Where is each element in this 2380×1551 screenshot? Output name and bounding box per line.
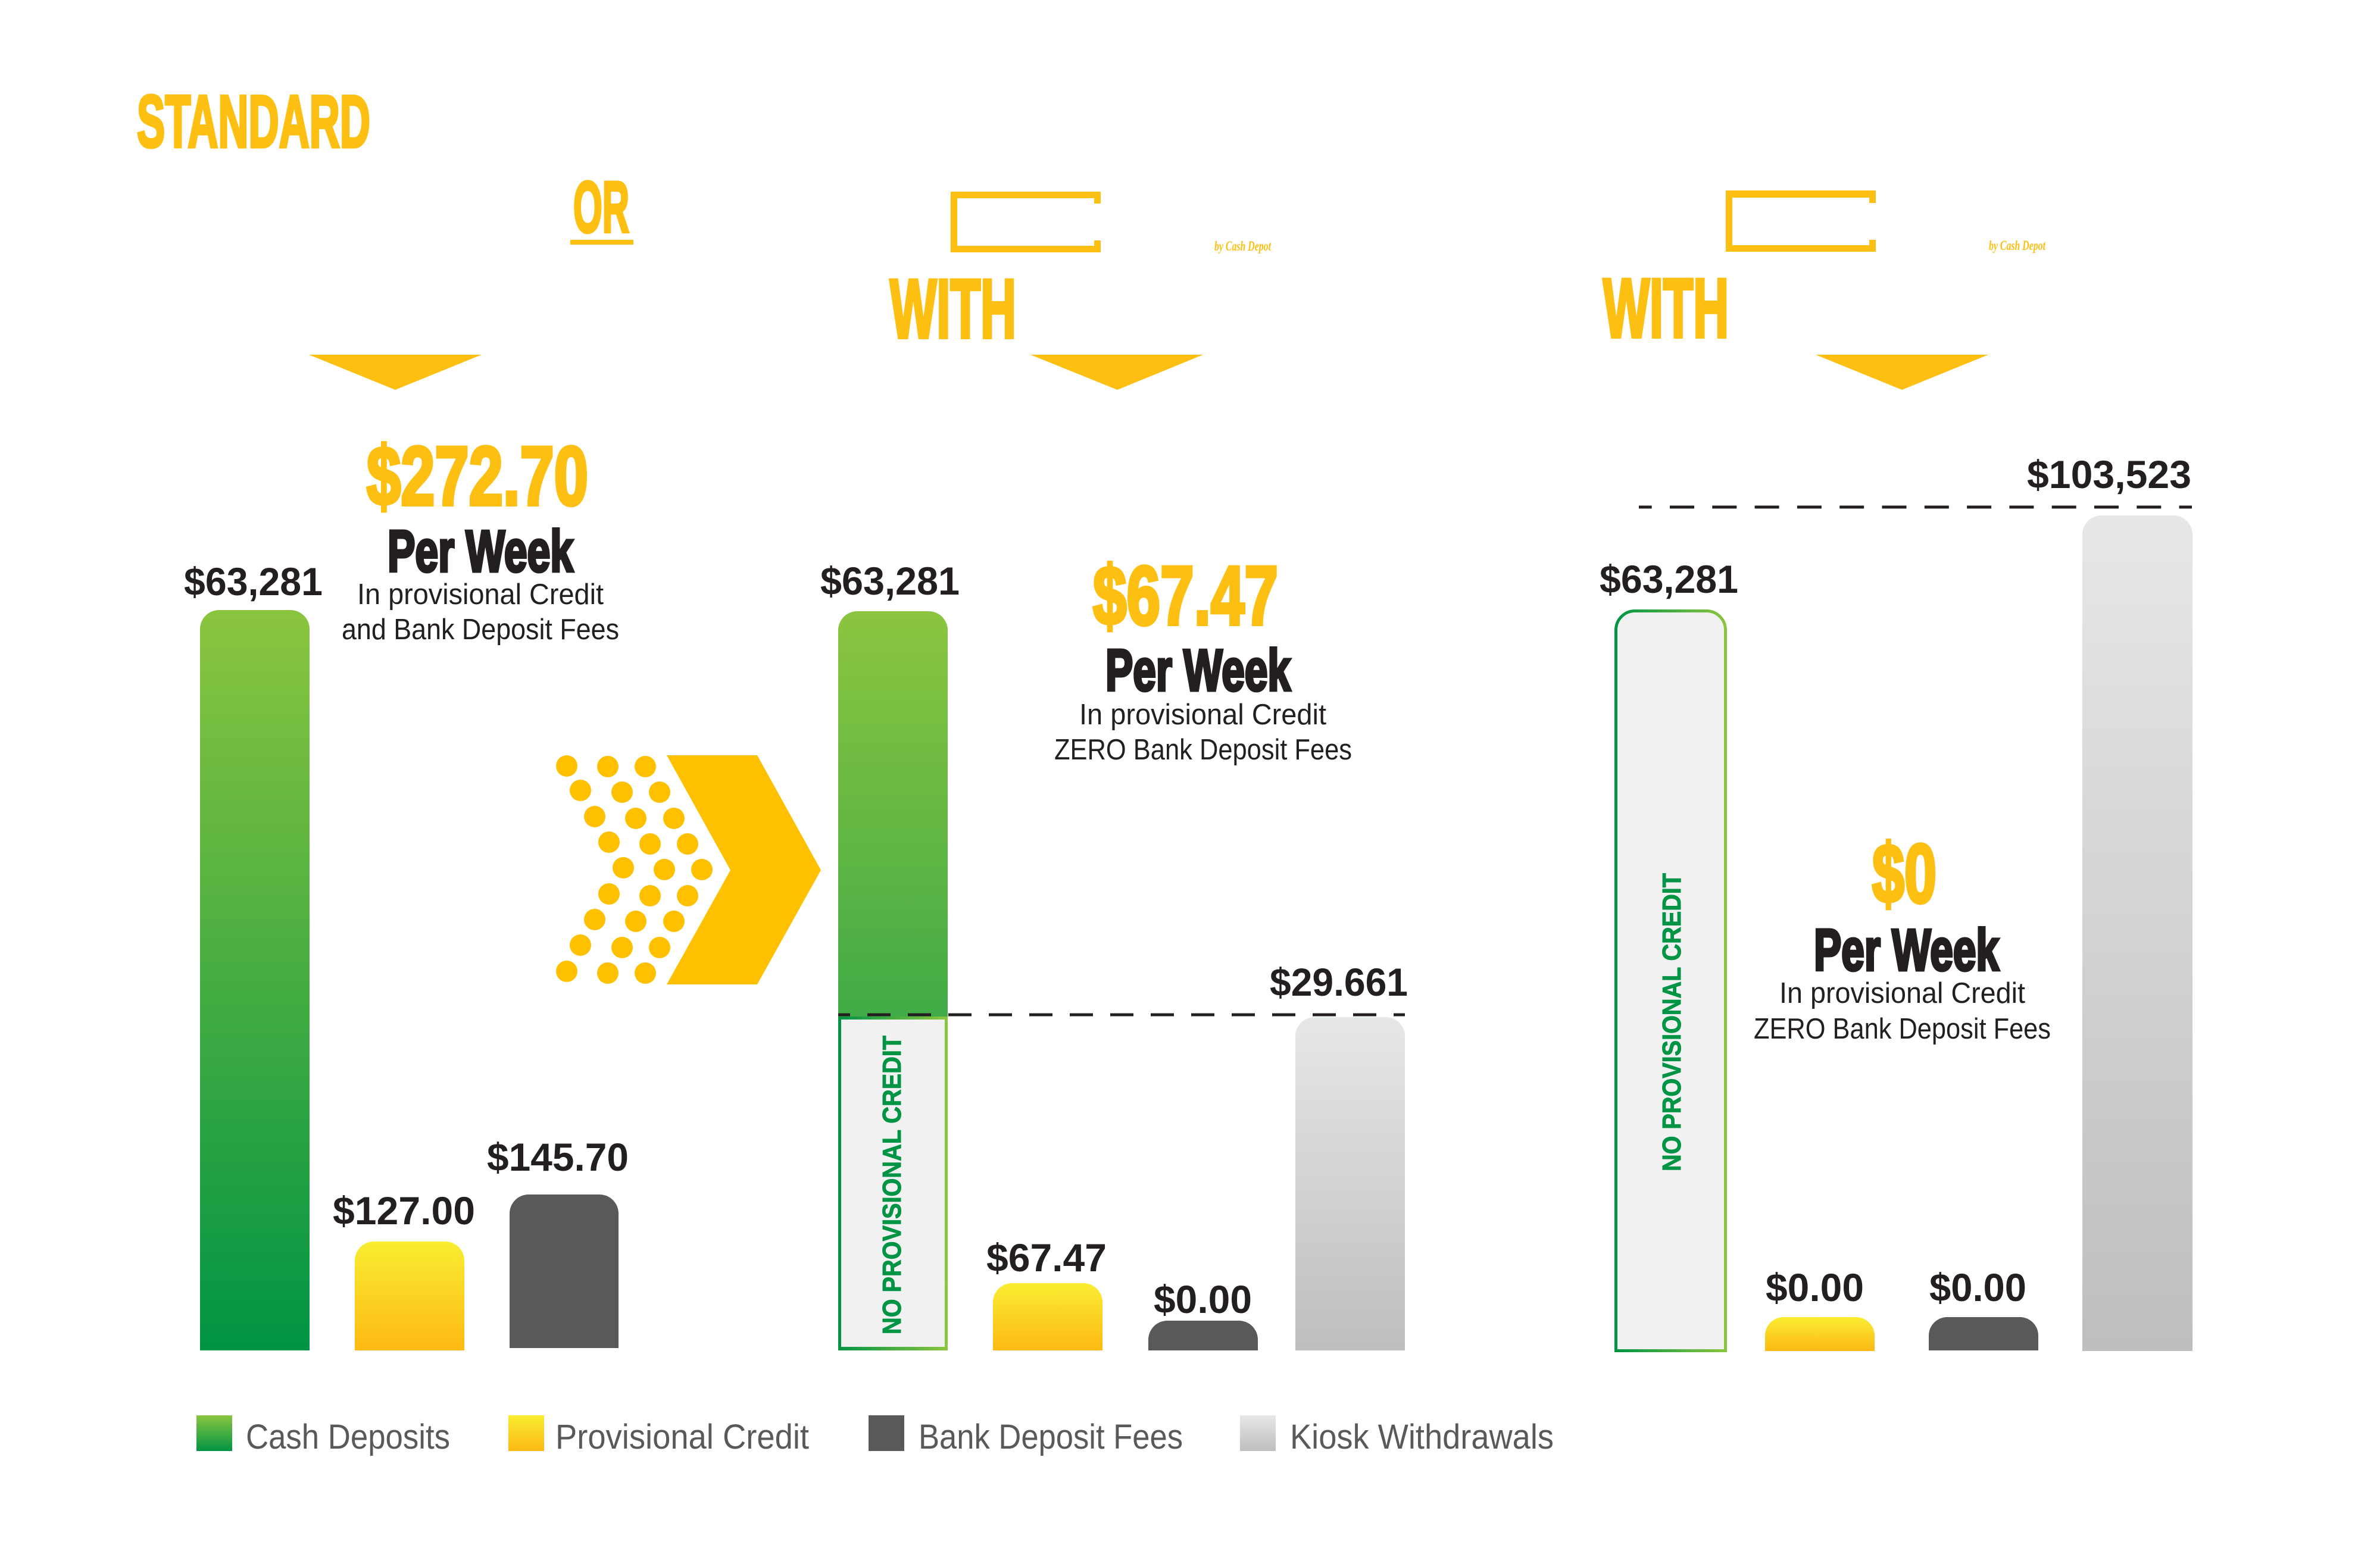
heading: OR [570, 167, 633, 248]
bar: kiosk withdrawals: $103,523 [2027, 452, 2191, 496]
box: no provisional credit: NO PROVISIONAL CREDIT [1657, 873, 1686, 1171]
dashed level line [838, 1013, 1405, 1017]
bar: kiosk withdrawals: $29.661 [1270, 960, 1408, 1004]
headline amount: $67.47 per week: ZERO Bank Deposit Fees [1054, 734, 1352, 766]
icon: down triangle [1030, 355, 1203, 390]
headline amount: $0 per week: Per Week [1814, 917, 1999, 983]
icon: down triangle [309, 355, 482, 390]
headline amount: $0 per week: In provisional Credit [1779, 977, 2025, 1009]
legend item: provisional credit: Provisional Credit [555, 1418, 809, 1456]
bar: bank deposit fees: $0.00 [1929, 1265, 2026, 1309]
legend item: kiosk withdrawals: Kiosk Withdrawals [1290, 1418, 1554, 1456]
headline amount: $272.70 per week: Per Week [388, 518, 573, 584]
box: no provisional credit [838, 1018, 948, 1350]
bar: provisional credit: $127.00 [333, 1189, 475, 1233]
panel: middle option [820, 192, 1408, 1350]
icon: down triangle [1816, 355, 1988, 390]
headline amount: $272.70 per week: In provisional Credit [357, 579, 604, 611]
bar: cash deposits: $63,281 [184, 559, 323, 603]
headline amount: $0 per week: ZERO Bank Deposit Fees [1754, 1013, 2051, 1045]
headline amount: $0 per week [1754, 827, 2051, 1045]
logo: bracket frame with byline: by Cash Depot [1989, 238, 2045, 253]
bar: bank deposit fees [1148, 1277, 1258, 1350]
headline amount: $272.70 per week: $272.70 [367, 429, 588, 523]
bar: cash deposits [820, 559, 960, 1017]
heading: STANDARD: STANDARD [137, 81, 370, 163]
bar: bank deposit fees [1929, 1265, 2038, 1350]
headline amount: $272.70 per week: and Bank Deposit Fees [342, 614, 619, 646]
heading: WITH: WITH [1603, 261, 1729, 355]
bar: provisional credit: $67.47 [986, 1236, 1107, 1280]
bar: provisional credit [986, 1236, 1107, 1350]
bar: bank deposit fees: $145.70 [487, 1135, 629, 1179]
bar: kiosk withdrawals [1270, 960, 1408, 1350]
arrow: dotted chevron [556, 755, 821, 984]
logo: bracket frame with byline: by Cash Depot [1214, 239, 1271, 254]
bar: kiosk withdrawals [2027, 452, 2192, 1351]
headline amount: $0 per week: $0 [1872, 827, 1937, 920]
box: no provisional credit: $63,281 [1600, 557, 1738, 601]
headline amount: $67.47 per week: $67.47 [1093, 549, 1278, 642]
headline amount: $67.47 per week [1054, 549, 1352, 766]
box: no provisional credit [1600, 557, 1738, 1351]
legend item: bank deposit fees: Bank Deposit Fees [919, 1418, 1183, 1456]
bar: provisional credit [333, 1189, 475, 1350]
logo: bracket frame with byline [951, 192, 1271, 254]
headline amount: $67.47 per week: Per Week [1105, 637, 1291, 703]
bar: bank deposit fees: $0.00 [1154, 1277, 1252, 1321]
logo: bracket frame with byline [1726, 190, 2045, 253]
heading: WITH: WITH [890, 262, 1016, 355]
box: no provisional credit: NO PROVISIONAL CREDIT [877, 1036, 907, 1334]
bar: provisional credit [1765, 1265, 1875, 1351]
headline amount: $67.47 per week: In provisional Credit [1079, 699, 1326, 731]
bar: cash deposits: $63,281 [820, 559, 960, 603]
legend [196, 1415, 1554, 1456]
legend item: cash deposits: Cash Deposits [246, 1418, 450, 1456]
bar: cash deposits [184, 559, 323, 1350]
bar: provisional credit: $0.00 [1766, 1265, 1864, 1309]
headline amount: $272.70 per week [342, 429, 619, 646]
panel: standard [137, 81, 633, 1350]
panel: right option [1600, 190, 2192, 1351]
bar: bank deposit fees [487, 1135, 629, 1348]
dashed level line [1639, 506, 2192, 508]
heading: OR: OR [573, 167, 629, 248]
